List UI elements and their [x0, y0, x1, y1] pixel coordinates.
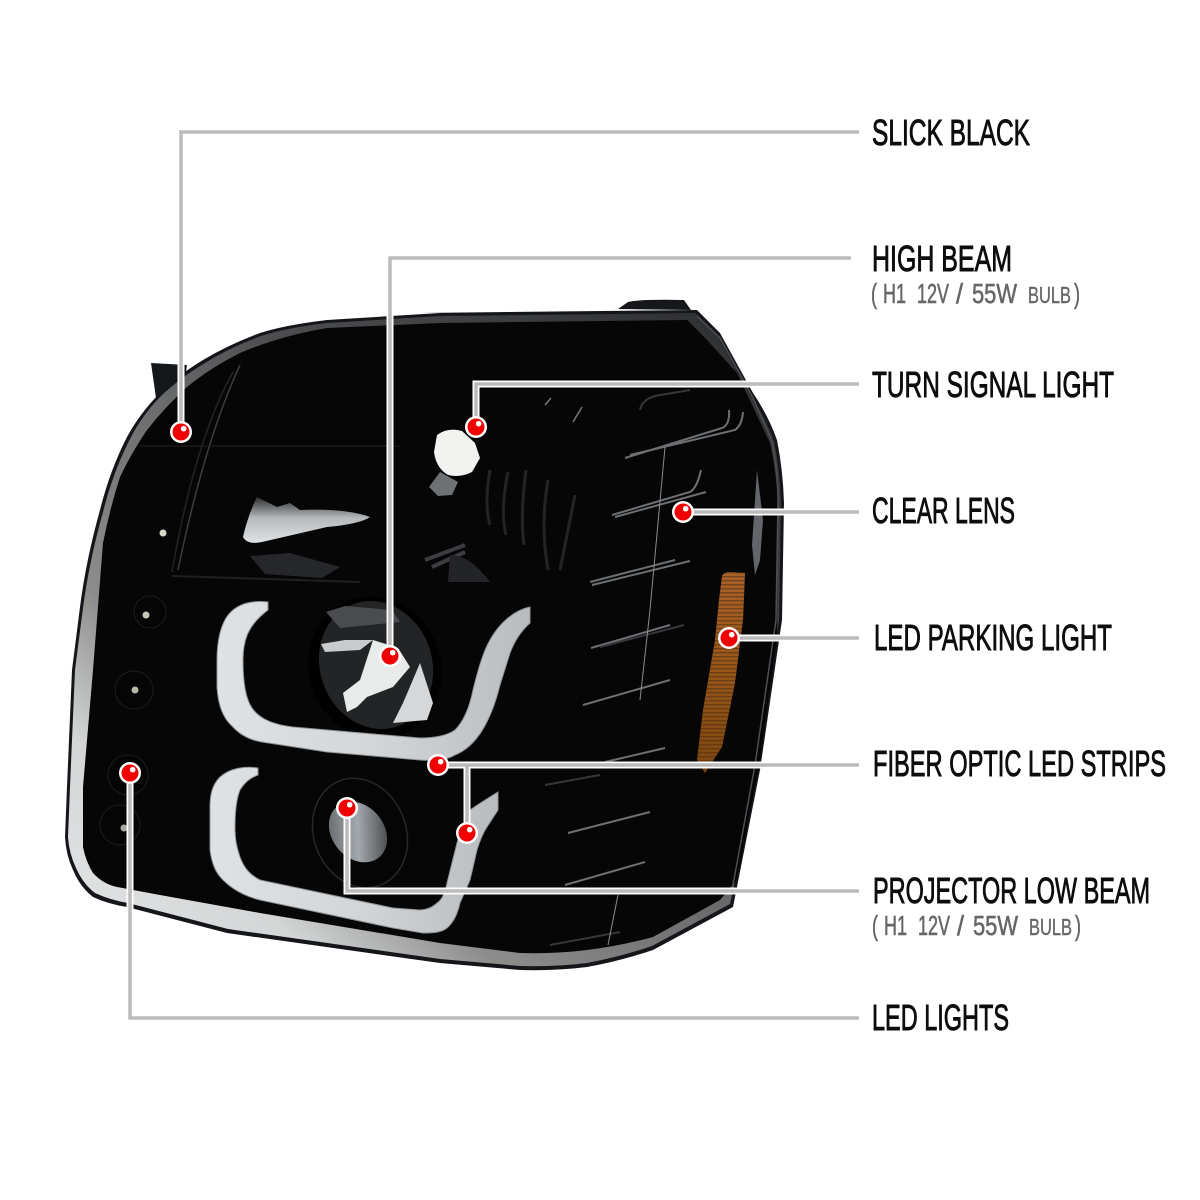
marker: clear lens — [672, 501, 694, 523]
upper reflector highlight — [243, 497, 370, 543]
reflector side facet — [250, 553, 340, 578]
label: LED lights: LED LIGHTS — [872, 997, 1009, 1038]
marker: slick black — [170, 421, 192, 443]
bezel right edge lines — [697, 316, 778, 885]
marker: high beam — [379, 645, 401, 667]
high beam bulb spec: ) — [1074, 278, 1080, 309]
marker: fiber optic lower — [456, 822, 478, 844]
high beam bulb spec — [871, 278, 1080, 309]
inner black lens area — [83, 320, 778, 953]
marker: turn signal — [465, 416, 487, 438]
leader: high beam — [390, 258, 851, 656]
bulb socket piece — [429, 472, 458, 496]
low beam bulb spec: / — [957, 910, 964, 941]
leader: turn signal — [476, 384, 859, 427]
low beam bulb spec: 55W — [973, 910, 1018, 941]
low beam bulb spec: BULB — [1029, 914, 1072, 940]
high beam bulb spec: 55W — [972, 278, 1017, 309]
high beam bulb spec: H1 — [883, 278, 906, 309]
low beam bulb spec — [872, 910, 1081, 941]
LED modules — [100, 530, 166, 845]
high beam bulb spec: BULB — [1028, 282, 1071, 308]
high beam bulb spec: ( — [871, 278, 877, 309]
leader: clear lens — [683, 508, 859, 516]
leader: fiber optic — [438, 765, 859, 833]
high beam reflector lens — [301, 585, 451, 745]
leader: LED lights — [130, 773, 859, 1018]
bulb port white highlight — [434, 430, 480, 476]
upper fiber optic LED tube — [217, 602, 530, 760]
lens ridge lines — [140, 365, 400, 582]
high beam bulb spec: / — [956, 278, 963, 309]
leader: LED parking — [729, 634, 859, 642]
marker: LED lights — [119, 762, 141, 784]
low beam bulb spec: H1 — [884, 910, 907, 941]
high beam bulb spec: 12V — [917, 278, 949, 309]
low beam projector lens — [317, 790, 399, 874]
leader: projector low beam — [347, 808, 859, 891]
label: high beam: HIGH BEAM — [872, 238, 1012, 279]
label: slick black: SLICK BLACK — [872, 112, 1030, 153]
label: clear lens: CLEAR LENS — [872, 490, 1015, 531]
mounting bracket — [151, 363, 187, 398]
low beam bulb spec: 12V — [918, 910, 950, 941]
leader: slick black — [181, 132, 859, 432]
low beam bulb spec: ) — [1075, 910, 1081, 941]
marker: fiber optic upper — [427, 754, 449, 776]
housing outer shell — [65, 310, 784, 970]
high beam reflector ring — [287, 577, 463, 759]
lens ribs — [545, 390, 743, 945]
marker: LED parking — [718, 627, 740, 649]
marker: projector low beam — [336, 797, 358, 819]
headlight assembly — [65, 300, 784, 970]
lens bezel ring — [68, 313, 781, 966]
top mounting tab — [618, 300, 691, 310]
lower fiber optic LED tube — [210, 767, 498, 933]
corner lens glint — [752, 470, 763, 575]
low beam projector housing — [296, 764, 424, 902]
reflector fins — [425, 398, 582, 582]
amber side marker — [697, 572, 745, 773]
low beam bulb spec: ( — [872, 910, 878, 941]
